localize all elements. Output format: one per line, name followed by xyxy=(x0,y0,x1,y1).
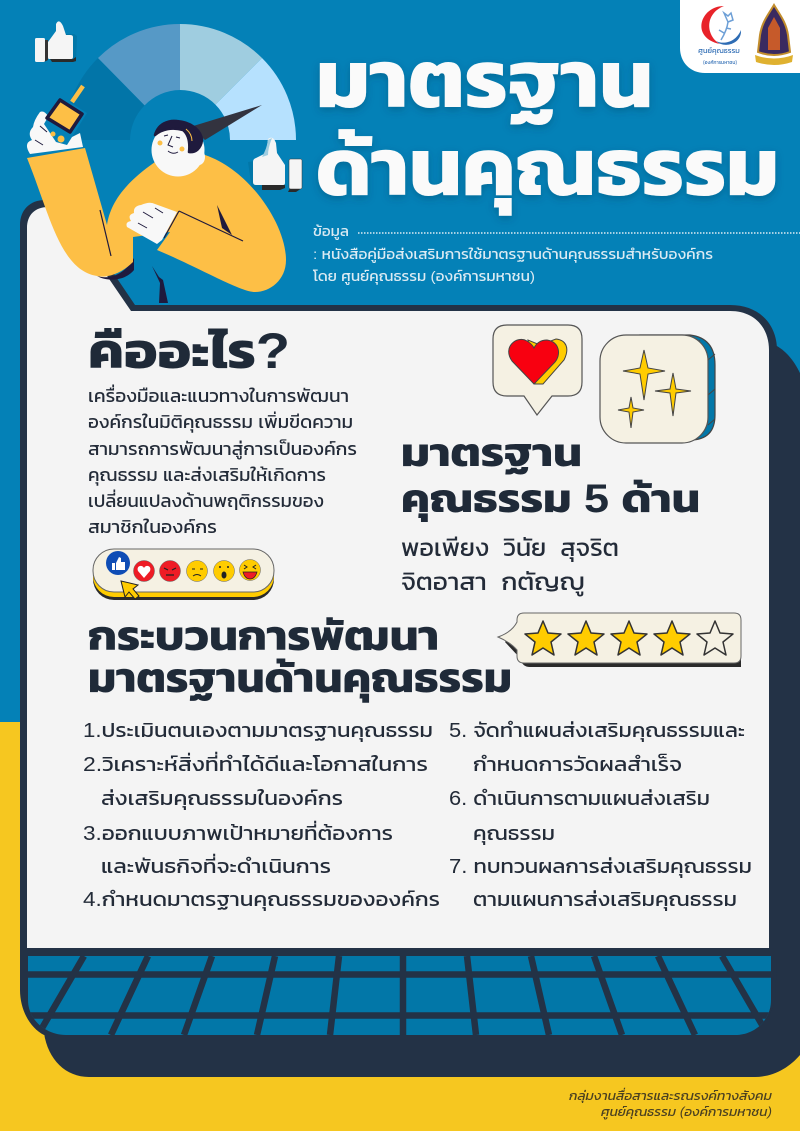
main panel frame xyxy=(20,200,777,1035)
logo box xyxy=(680,0,800,73)
wow xyxy=(214,560,234,582)
process list: right column: 7. ทบทวนผลการส่งเสริมคุณธรรม xyxy=(449,856,752,878)
stars xyxy=(525,621,733,655)
legs dark xyxy=(152,266,168,303)
sad xyxy=(186,560,208,582)
icon: sparkle box xyxy=(600,335,715,443)
process list: right column: ตามแผนการส่งเสริมคุณธรรม xyxy=(473,889,737,911)
logo: moral center: (องค์การมหาชน) xyxy=(703,60,737,66)
icon: thumbs up left xyxy=(35,21,77,62)
dark backing panel xyxy=(44,340,800,1077)
paragraph: definition: คุณธรรม และส่งเสริมให้เกิดการ xyxy=(88,465,326,486)
source note: โดย ศูนย์คุณธรรม (องค์การมหาชน) xyxy=(312,268,535,286)
heading: five standards: คุณธรรม 5 ด้าน xyxy=(401,477,700,522)
heart xyxy=(134,560,154,582)
head xyxy=(152,124,204,176)
process list: left column: 1.ประเมินตนเองตามมาตรฐานคุณธรรม xyxy=(83,720,433,742)
process list: left column: 3.ออกแบบภาพเป้าหมายที่ต้องการ xyxy=(83,820,393,845)
cursor xyxy=(121,581,139,599)
paragraph: definition: สมาชิกในองค์กร xyxy=(88,517,217,537)
process list: left column xyxy=(83,720,440,911)
laugh xyxy=(240,560,260,580)
paragraph: definition: เครื่องมือและแนวทางในการพัฒนา xyxy=(88,384,349,406)
source note xyxy=(312,223,800,286)
footer credit: กลุ่มงานสื่อสารและรณรงค์ทางสังคม xyxy=(569,1087,772,1104)
paragraph: definition: เปลี่ยนแปลงด้านพฤติกรรมของ xyxy=(88,489,324,511)
footer credit: ศูนย์คุณธรรม (องค์การมหาชน) xyxy=(601,1104,772,1120)
neck shadow xyxy=(168,158,190,174)
title xyxy=(316,34,779,217)
device xyxy=(44,86,87,145)
reaction bar xyxy=(93,549,274,600)
heading: what is it: คืออะไร? xyxy=(88,323,290,379)
heading: five standards: มาตรฐาน xyxy=(401,431,582,475)
process list: right column xyxy=(449,720,752,911)
icon: heart bubble xyxy=(493,325,582,415)
star rating bubble xyxy=(498,613,741,667)
gauge xyxy=(64,24,296,140)
front hand xyxy=(126,203,177,244)
text: five standards list xyxy=(401,535,619,596)
like xyxy=(106,551,130,575)
paragraph: definition: สามารถการพัฒนาสู่การเป็นองค์กร xyxy=(88,439,357,461)
heading: five standards xyxy=(401,431,700,522)
person illustration xyxy=(27,86,286,303)
heading: development process: มาตรฐานด้านคุณธรรม xyxy=(88,654,512,703)
paragraph: definition xyxy=(88,384,357,537)
process list: right column: กำหนดการวัดผลสำเร็จ xyxy=(473,753,682,776)
needle xyxy=(190,105,262,140)
process list: left column: และพันธกิจที่จะดำเนินการ xyxy=(101,853,331,878)
footer credit xyxy=(569,1087,772,1120)
raised hand xyxy=(27,112,83,154)
arm shadow xyxy=(97,258,134,280)
process list: left column: 4.กำหนดมาตรฐานคุณธรรมขององค์กร xyxy=(83,889,440,911)
process list: right column: 5. จัดทำแผนส่งเสริมคุณธรรมและ xyxy=(449,720,745,742)
keyboard grid xyxy=(28,956,771,1035)
logo: moral center xyxy=(698,6,741,66)
logo: moral center: ศูนย์คุณธรรม xyxy=(698,46,740,55)
icon: thumbs up right xyxy=(248,138,302,192)
face xyxy=(158,135,184,153)
text: five standards list: พอเพียง วินัย สุจริต xyxy=(401,535,619,562)
title: มาตรฐาน xyxy=(316,34,653,125)
text: five standards list: จิตอาสา กตัญญู xyxy=(401,569,585,596)
yellow sweater xyxy=(27,148,286,292)
title: ด้านคุณธรรม xyxy=(316,122,779,217)
source note: : หนังสือคู่มือส่งเสริมการใช้มาตรฐานด้านคุณธรรมสำหรับองค์กร xyxy=(313,246,713,264)
hair xyxy=(155,121,202,152)
process list: right column: คุณธรรม xyxy=(473,823,555,845)
source note: ข้อมูล xyxy=(313,223,349,241)
sweater lines xyxy=(100,210,243,256)
main panel white area xyxy=(27,207,769,948)
logo: emblem xyxy=(755,5,793,65)
angry xyxy=(160,560,180,582)
process list: left column: ส่งเสริมคุณธรรมในองค์กร xyxy=(101,788,343,810)
heading: development process xyxy=(88,612,512,703)
paragraph: definition: องค์กรในมิติคุณธรรม เพิ่มขีดความ xyxy=(88,411,353,433)
process list: left column: 2.วิเคราะห์สิ่งที่ทำได้ดีและโอกาสในการ xyxy=(83,751,428,776)
heading: development process: กระบวนการพัฒนา xyxy=(88,612,439,659)
process list: right column: 6. ดำเนินการตามแผนส่งเสริม xyxy=(449,788,710,810)
